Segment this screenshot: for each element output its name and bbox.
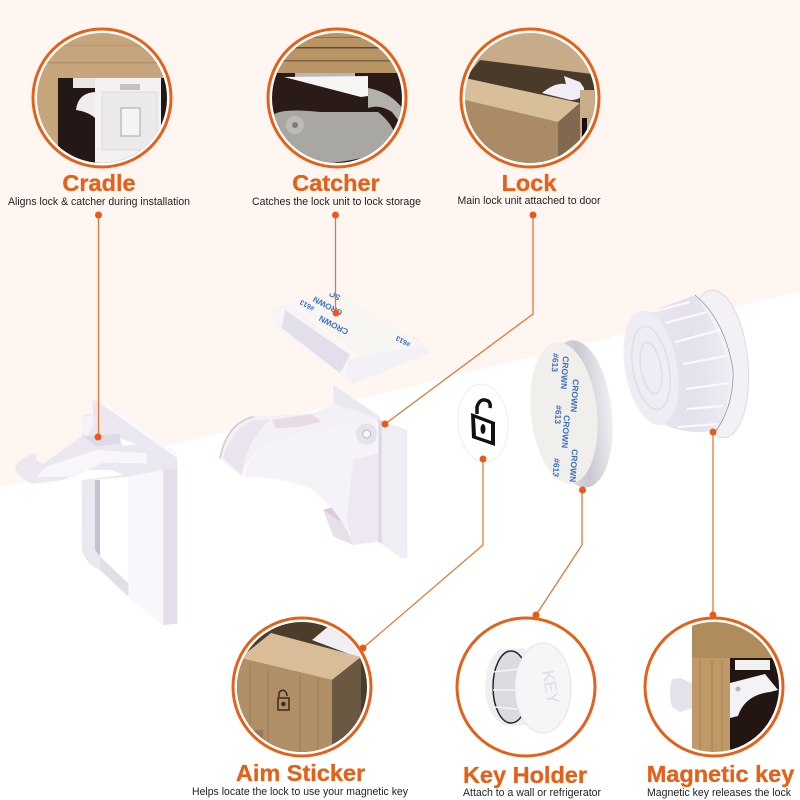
leader line: lock [382, 212, 536, 428]
heading: Key Holder: Key Holder [463, 762, 587, 788]
text: aim sticker description: Helps locate the lock to use your magnetic key [192, 786, 408, 798]
panel: key holder photo circle [457, 618, 595, 756]
panel: lock photo circle [460, 25, 600, 170]
icon: aim sticker [455, 382, 511, 464]
component: catcher part with adhesive tape: #613 [395, 334, 412, 347]
panel: key holder photo circle: KEY [538, 669, 563, 705]
panel: magnetic key photo circle [645, 618, 787, 758]
component: magnetic key [615, 288, 754, 440]
text: magnetic key description: Magnetic key releases the lock [647, 787, 791, 799]
text: cradle description: Aligns lock & catcher during installation [8, 196, 190, 208]
component: key holder adhesive disc: #613 [551, 458, 562, 478]
component: catcher part with adhesive tape: #613 [412, 331, 429, 344]
text: key holder description: Attach to a wall or refrigerator [463, 787, 601, 799]
component: key holder adhesive disc [530, 340, 612, 488]
leader line: catcher [332, 212, 340, 316]
component: key holder adhesive disc: CROWN [559, 356, 571, 390]
component: catcher part with adhesive tape: #613 [299, 298, 316, 311]
panel: aim sticker photo circle [230, 615, 375, 760]
heading: Aim Sticker: Aim Sticker [236, 760, 365, 786]
heading: Magnetic key: Magnetic key [647, 761, 794, 787]
component: key holder adhesive disc: #613 [550, 353, 561, 373]
leader line: aim sticker [360, 456, 486, 652]
leader line: magnetic key [710, 428, 716, 618]
component: key holder adhesive disc: #613 [553, 405, 564, 425]
component: cradle part [15, 401, 177, 625]
leader line: key holder [532, 486, 586, 618]
component: catcher part with adhesive tape: CROWN [312, 294, 344, 317]
text: catcher description: Catches the lock unit to lock storage [252, 196, 421, 208]
leader line: cradle [94, 212, 102, 440]
component: key holder adhesive disc: CROWN [568, 449, 580, 483]
heading: Lock: Lock [502, 170, 557, 196]
component: key holder adhesive disc: CROWN [560, 415, 572, 449]
component: key holder adhesive disc: CROWN [569, 379, 581, 413]
heading: Cradle: Cradle [62, 170, 136, 196]
panel: cradle photo circle [30, 25, 175, 173]
icon: printed lock on door [278, 690, 289, 710]
component: catcher part with adhesive tape [273, 289, 430, 384]
component: catcher part with adhesive tape: SO [328, 289, 342, 302]
text: lock description: Main lock unit attached to door [458, 195, 601, 207]
component: lock part [220, 385, 407, 558]
component: catcher part with adhesive tape: CROWN [318, 313, 350, 336]
heading: Catcher: Catcher [292, 170, 380, 196]
panel: catcher photo circle [265, 25, 410, 173]
